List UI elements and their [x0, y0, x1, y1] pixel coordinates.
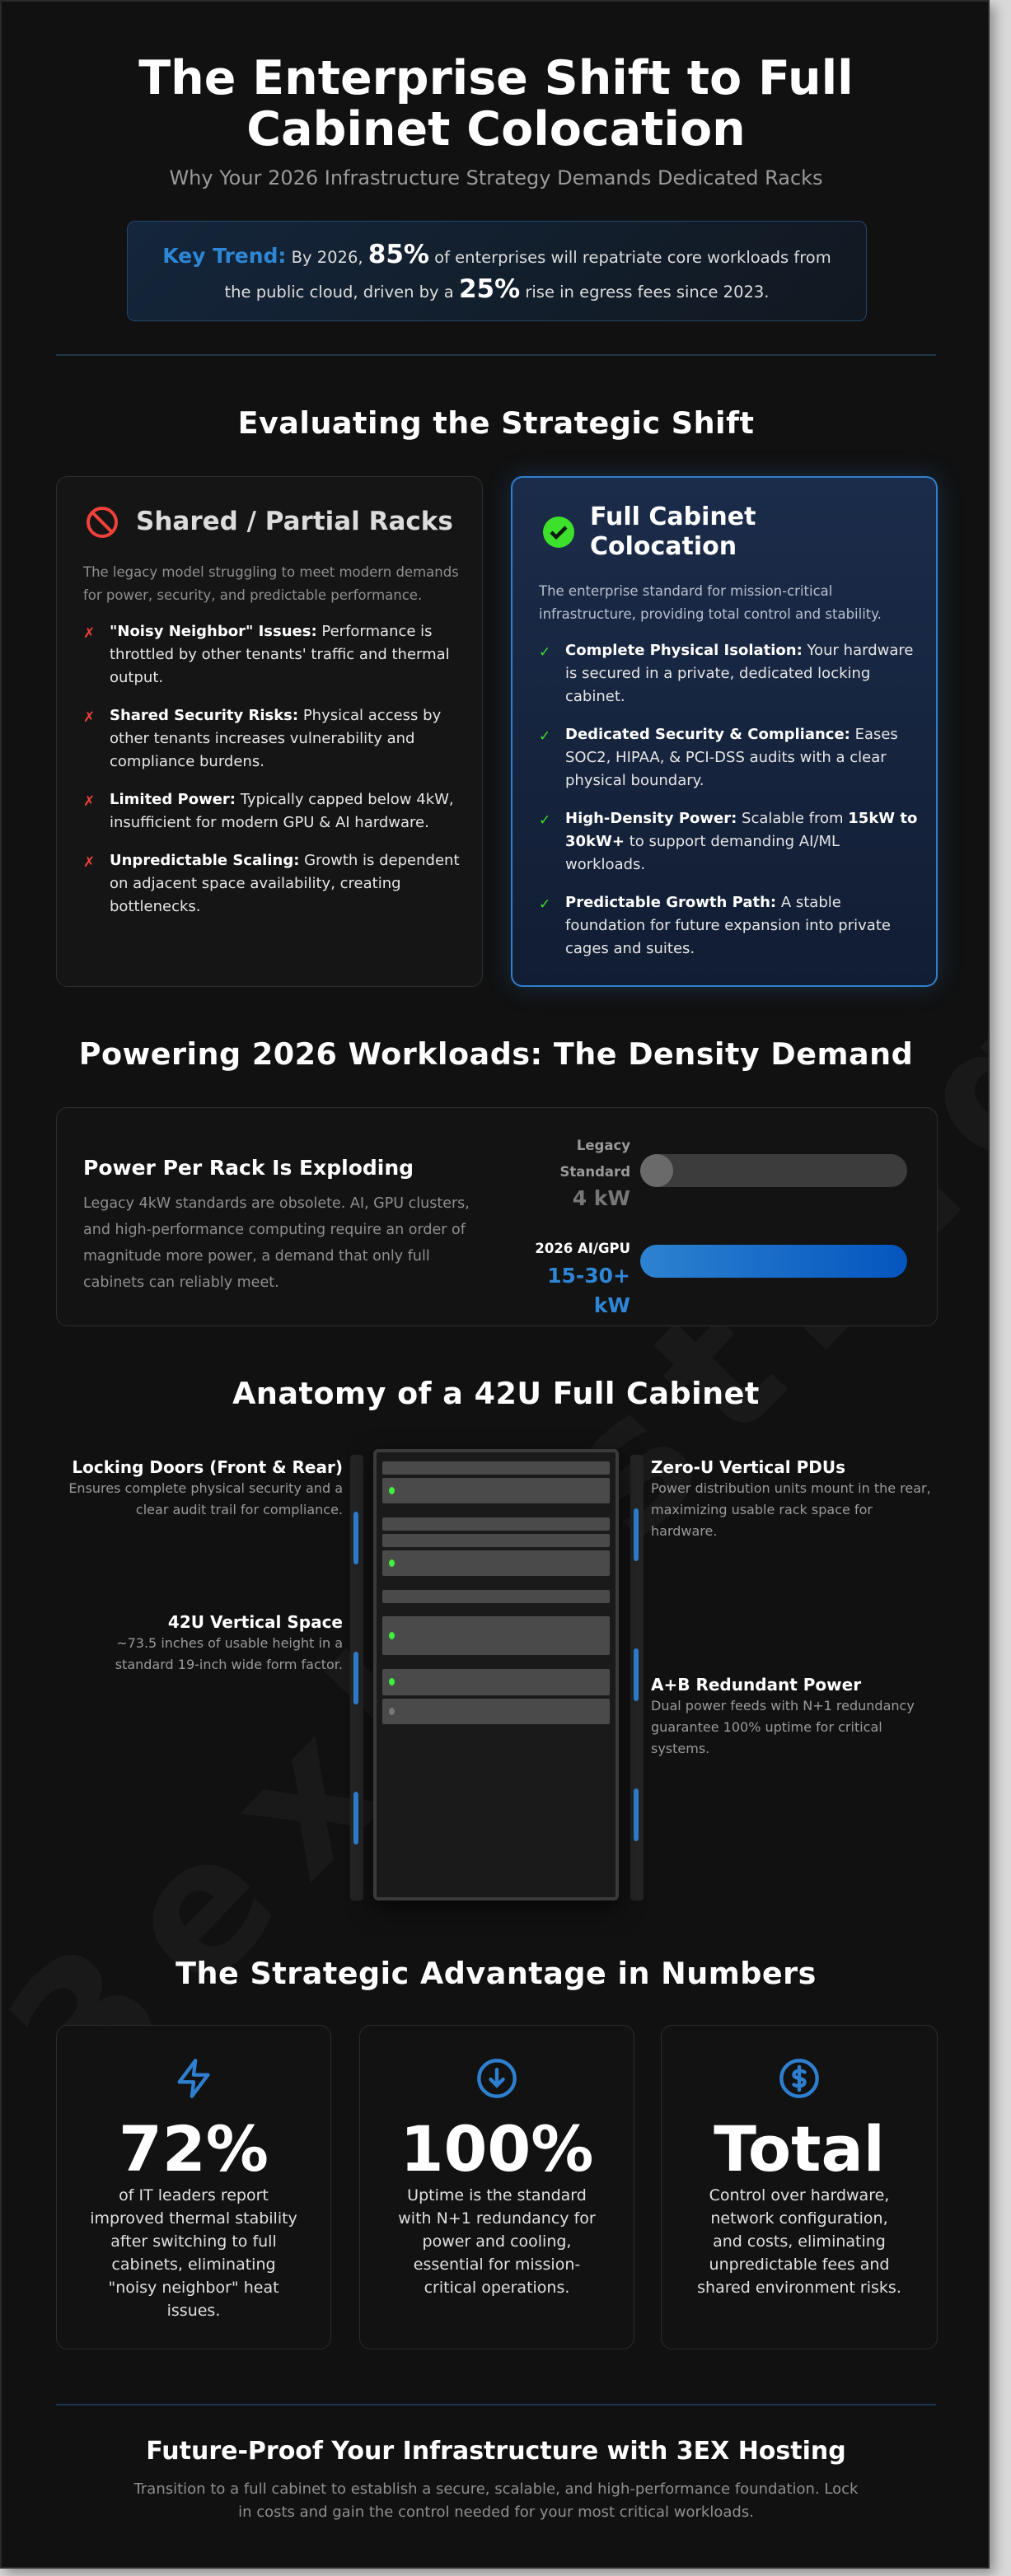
heading: Shared / Partial Racks [136, 507, 453, 536]
icon: lightning [178, 2059, 209, 2098]
label: 42U space: 42U Vertical Space [168, 1612, 343, 1632]
list: benefits: ✓ [539, 812, 550, 829]
heading: Full Cabinet [590, 503, 756, 531]
stat card: 72%: of IT leaders report improved thermal stability after switching to full cabinets, eliminating "noisy neighbor" heat issues. [90, 2186, 297, 2320]
list: drawbacks: ✗ [83, 625, 95, 642]
list: benefits [539, 642, 917, 957]
label: locking doors: Locking Doors (Front & Rear) [72, 1457, 343, 1477]
list: benefits: ✓ [539, 728, 550, 745]
stat card: 100%: Uptime is the standard with N+1 redundancy for power and cooling, essential for mission-critical operations. [398, 2186, 596, 2297]
list: drawbacks: ✗ [83, 709, 95, 726]
bar chart: Standard [559, 1164, 630, 1180]
list: drawbacks: Shared Security Risks: Physical access by other tenants increases vulnerability and compliance burdens. [110, 707, 441, 770]
list: benefits: Dedicated Security & Compliance: Eases SOC2, HIPAA, & PCI-DSS audits with a clear physical boundary. [565, 726, 898, 789]
list: drawbacks: ✗ [83, 854, 95, 871]
label: A+B power: Dual power feeds with N+1 redundancy guarantee 100% uptime for critical systems. [651, 1698, 915, 1756]
callout: key trend: the public cloud, driven by a 25% rise in egress fees since 2023. [224, 274, 770, 304]
heading: Colocation [590, 532, 737, 561]
list: drawbacks: Unpredictable Scaling: Growth is dependent on adjacent space availability, creating bottlenecks. [110, 852, 460, 915]
heading: powering: Powering 2026 Workloads: The Density Demand [79, 1036, 913, 1072]
stat card: 100%: 100% [400, 2112, 593, 2186]
callout: key trend [127, 221, 867, 321]
panel: shared racks [56, 476, 483, 987]
description: The legacy model struggling to meet modern demands for power, security, and predictable performance. [83, 564, 459, 603]
icon: arrow circle [477, 2059, 517, 2098]
stat card: 72% [56, 2025, 331, 2349]
text block: Power Per Rack Is Exploding [83, 1156, 414, 1180]
bar chart: Legacy [577, 1138, 630, 1153]
text block: Legacy 4kW standards are obsolete. AI, GPU clusters, and high-performance computing require an order of magnitude more power, a demand that only full cabinets can reliably meet. [83, 1195, 470, 1291]
heading [590, 503, 756, 561]
list: benefits: ✓ [539, 644, 550, 661]
label: PDUs: Power distribution units mount in the rear, maximizing usable rack space for hardware. [651, 1480, 931, 1539]
subtitle: Why Your 2026 Infrastructure Strategy Demands Dedicated Racks [169, 166, 823, 189]
panel: density [56, 1107, 938, 1326]
stat card: total [661, 2025, 938, 2349]
label: locking doors [68, 1457, 343, 1517]
bar chart: 2026 AI/GPU [535, 1241, 630, 1256]
footer heading: Future-Proof Your Infrastructure with 3EX Hosting [146, 2437, 846, 2466]
panel: full cabinet [511, 476, 938, 987]
list: drawbacks [83, 623, 460, 915]
list: benefits: Predictable Growth Path: A stable foundation for future expansion into private cages and suites. [565, 894, 891, 957]
callout: key trend: Key Trend: By 2026, 85% of enterprises will repatriate core workloads from [162, 240, 831, 269]
heading: evaluating: Evaluating the Strategic Shift [238, 405, 754, 441]
icon: check [543, 517, 574, 548]
bar chart [535, 1138, 907, 1317]
footer text: Transition to a full cabinet to establish a secure, scalable, and high-performance foundation. Lock in costs and gain the control needed for your most critical workloads. [134, 2480, 858, 2521]
stat card: 72%: 72% [119, 2112, 269, 2186]
title: Cabinet Colocation [246, 102, 746, 157]
title: The Enterprise Shift to Full [138, 51, 854, 105]
heading: anatomy: Anatomy of a 42U Full Cabinet [232, 1376, 760, 1411]
stat card: total: Total [714, 2112, 885, 2186]
list: benefits: Complete Physical Isolation: Your hardware is secured in a private, dedicated locking cabinet. [565, 642, 913, 705]
list: drawbacks: ✗ [83, 793, 95, 810]
list: drawbacks: Limited Power: Typically capped below 4kW, insufficient for modern GPU & AI hardware. [110, 791, 454, 831]
list: benefits: ✓ [539, 896, 550, 913]
list: benefits: High-Density Power: Scalable from 15kW to 30kW+ to support demanding AI/ML workloads. [565, 810, 917, 873]
stat card: total: Control over hardware, network configuration, and costs, eliminating unpredictable fees and shared environment risks. [697, 2186, 901, 2297]
label: PDUs: Zero-U Vertical PDUs [651, 1457, 845, 1477]
description: The enterprise standard for mission-critical infrastructure, providing total control and stability. [539, 583, 882, 622]
label: A+B power: A+B Redundant Power [651, 1675, 861, 1695]
bar chart: 15-30+ [547, 1264, 630, 1288]
label: 42U space: ~73.5 inches of usable height in a standard 19-inch wide form factor. [115, 1635, 343, 1672]
icon: prohibited [87, 507, 118, 538]
bar chart: 4 kW [573, 1186, 630, 1210]
bar chart: kW [594, 1293, 630, 1317]
diagram: cabinet [350, 1449, 644, 1900]
label: locking doors: Ensures complete physical security and a clear audit trail for compliance. [68, 1480, 343, 1517]
icon: dollar [779, 2059, 819, 2098]
list: drawbacks: "Noisy Neighbor" Issues: Performance is throttled by other tenants' traffic and thermal output. [110, 623, 450, 686]
label: 42U space [115, 1612, 343, 1672]
title [138, 51, 854, 157]
heading: numbers: The Strategic Advantage in Numbers [176, 1956, 817, 1991]
stat card: 100% [359, 2025, 634, 2349]
